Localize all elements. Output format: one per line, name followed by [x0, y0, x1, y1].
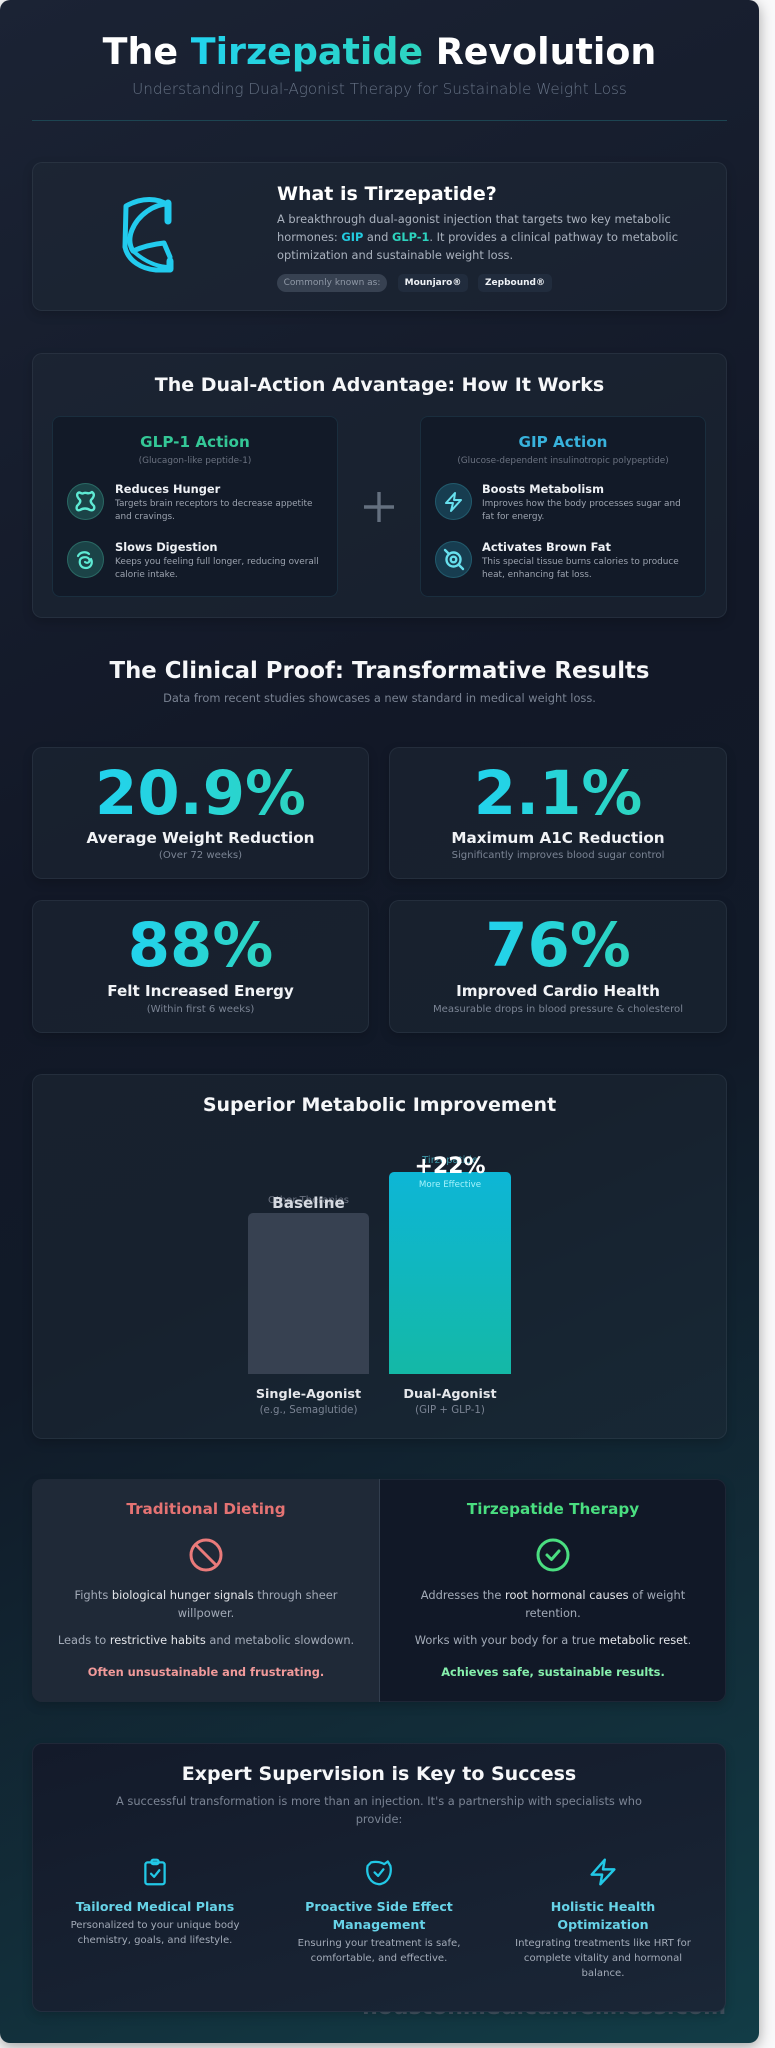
- stat value: 2.1%: [474, 759, 642, 829]
- icon: bolt: [590, 1858, 616, 1886]
- subheading: clinical proof: Data from recent studies showcases a new standard in medical weight loss.: [163, 691, 596, 705]
- watermark: houstonmedicalwellness.com: [362, 1995, 726, 2020]
- heading: What is Tirzepatide?: [277, 183, 497, 205]
- tag: Zepbound: [478, 274, 552, 292]
- text: Addresses the root hormonal causes of weight: [421, 1588, 685, 1602]
- stat card: energy: [32, 900, 369, 1033]
- icon: shield: [366, 1860, 392, 1886]
- description line: balance.: [582, 1968, 624, 1979]
- title: Proactive Side Effect: [305, 1899, 453, 1914]
- icon: activates brown fat: [435, 541, 472, 578]
- description line: comfortable, and effective.: [311, 1953, 447, 1964]
- tag: Mounjaro: Mounjaro®: [405, 278, 461, 288]
- axis label: dual agonist: Dual-Agonist: [403, 1387, 497, 1402]
- text: boosts metabolism: Boosts Metabolism: [482, 482, 604, 496]
- title line: Management: [333, 1917, 425, 1932]
- bar value: baseline: Baseline: [272, 1194, 345, 1212]
- description line: heat, enhancing fat loss.: [482, 570, 592, 580]
- stat note: Significantly improves blood sugar control: [452, 850, 664, 861]
- bar value: +22%: +22%: [414, 1154, 486, 1179]
- description line: and cravings.: [115, 512, 175, 522]
- GIP subtitle: (Glucose-dependent insulinotropic polypeptide): [457, 456, 669, 466]
- icon: tirzepatide molecule: [122, 197, 174, 272]
- stat card: cardio: [389, 900, 727, 1033]
- subtitle: Understanding Dual-Agonist Therapy for Sustainable Weight Loss: [132, 80, 627, 98]
- heading: The Dual-Action Advantage: How It Works: [155, 374, 604, 396]
- stat label: Felt Increased Energy: [107, 982, 294, 1000]
- text line: willpower.: [178, 1606, 234, 1620]
- title: Holistic Health: [551, 1899, 655, 1914]
- heading: Tirzepatide Therapy: [467, 1500, 639, 1518]
- text: slows digestion: Slows Digestion: [115, 540, 218, 554]
- axis note: single agonist: (e.g., Semaglutide): [260, 1405, 357, 1416]
- text: Fights biological hunger signals through sheer: [75, 1588, 337, 1602]
- stat card: A1C: [389, 747, 727, 879]
- heading: Expert Supervision is Key to Success: [182, 1763, 576, 1785]
- description: Integrating treatments like HRT for: [515, 1938, 691, 1949]
- stat label: Improved Cardio Health: [456, 982, 660, 1000]
- stat note: Measurable drops in blood pressure & cholesterol: [433, 1004, 683, 1015]
- text line: retention.: [525, 1606, 581, 1620]
- description: Ensuring your treatment is safe,: [298, 1938, 460, 1949]
- stat value: 76%: [485, 911, 631, 981]
- description: activates brown fat: This special tissue burns calories to produce: [482, 557, 679, 567]
- icon: plus: [364, 492, 394, 522]
- description: Personalized to your unique body: [71, 1920, 239, 1931]
- icon: slows digestion: [67, 541, 104, 578]
- bar caption: other therapies: Other Therapies: [268, 1195, 349, 1206]
- intro: [116, 1794, 642, 1826]
- title: The Tirzepatide Revolution: [103, 30, 656, 73]
- tag: commonly known as: Commonly known as:: [284, 278, 380, 288]
- description: [277, 212, 678, 262]
- stat note: (Over 72 weeks): [159, 850, 242, 861]
- description: boosts metabolism: Improves how the body processes sugar and: [482, 499, 681, 509]
- GLP-1 subtitle: (Glucagon-like peptide-1): [139, 456, 251, 466]
- icon: clipboard: [144, 1858, 166, 1886]
- text: Works with your body for a true metabolic reset.: [415, 1633, 691, 1647]
- column: holistic health: [515, 1858, 691, 1979]
- column: traditional dieting: [32, 1479, 380, 1702]
- conclusion: Often unsustainable and frustrating.: [88, 1665, 324, 1679]
- tag: Mounjaro: [398, 274, 468, 292]
- bar: dual agonist: [389, 1172, 511, 1374]
- stat value: 20.9%: [95, 759, 306, 829]
- column: side effects: [298, 1860, 460, 1964]
- description: slows digestion: Keeps you feeling full longer, reducing overall: [115, 557, 319, 567]
- stat label: Average Weight Reduction: [87, 829, 314, 847]
- intro: provide:: [356, 1812, 402, 1826]
- icon: reduces hunger: [67, 483, 104, 520]
- description: reduces hunger: Targets brain receptors to decrease appetite: [115, 499, 312, 509]
- stat value: 88%: [128, 911, 273, 981]
- GIP heading: GIP Action: [518, 433, 608, 451]
- stat label: Maximum A1C Reduction: [451, 829, 665, 847]
- bar caption: tirzepatide: Tirzepatide: [422, 1155, 478, 1166]
- text: reduces hunger: Reduces Hunger: [115, 482, 220, 496]
- description: A breakthrough dual-agonist injection that targets two key metabolic: [277, 212, 671, 226]
- panel: comparison: [32, 1479, 726, 1702]
- card: GLP-1: [52, 416, 338, 597]
- GLP-1 heading: GLP-1 Action: [140, 433, 250, 451]
- tag: commonly known as: [277, 274, 387, 292]
- title: Tailored Medical Plans: [76, 1899, 234, 1914]
- tag: Zepbound: Zepbound®: [485, 278, 545, 288]
- stat card: weight: [32, 747, 369, 879]
- description: optimization and sustainable weight loss.: [277, 248, 513, 262]
- description line: fat for energy.: [482, 512, 544, 522]
- panel: expert supervision: [32, 1743, 726, 2012]
- icon: no: [190, 1538, 222, 1572]
- column: medical plans: [71, 1858, 240, 1946]
- text: activates brown fat: Activates Brown Fat: [482, 540, 611, 554]
- bar: single agonist: [248, 1213, 369, 1374]
- header: [102, 30, 656, 98]
- text: Leads to restrictive habits and metabolic slowdown.: [58, 1633, 354, 1647]
- chart heading: Superior Metabolic Improvement: [203, 1094, 556, 1116]
- heading: clinical proof: The Clinical Proof: Transformative Results: [110, 658, 649, 684]
- description line: complete vitality and hormonal: [524, 1953, 682, 1964]
- conclusion: Achieves safe, sustainable results.: [441, 1665, 665, 1679]
- stat note: (Within first 6 weeks): [147, 1004, 254, 1015]
- icon: check: [536, 1538, 570, 1572]
- panel: dual action: [32, 353, 727, 618]
- axis note: dual agonist: (GIP + GLP-1): [415, 1405, 485, 1416]
- axis label: single agonist: Single-Agonist: [256, 1387, 361, 1402]
- description: hormones: GIP and GLP-1. It provides a clinical pathway to metabolic: [277, 230, 678, 244]
- intro: A successful transformation is more than an injection. It's a partnership with specialists who: [116, 1794, 642, 1808]
- panel: what is tirzepatide: [32, 162, 727, 311]
- description line: chemistry, goals, and lifestyle.: [78, 1935, 232, 1946]
- column: tirzepatide therapy: [415, 1500, 691, 1679]
- card: GIP: [420, 416, 706, 597]
- description line: calorie intake.: [115, 570, 178, 580]
- panel: bar chart: [32, 1074, 727, 1439]
- heading: Traditional Dieting: [126, 1500, 286, 1518]
- title line: Optimization: [557, 1917, 649, 1932]
- icon: boosts metabolism: [435, 483, 472, 520]
- bar note: more effective: More Effective: [419, 1180, 481, 1190]
